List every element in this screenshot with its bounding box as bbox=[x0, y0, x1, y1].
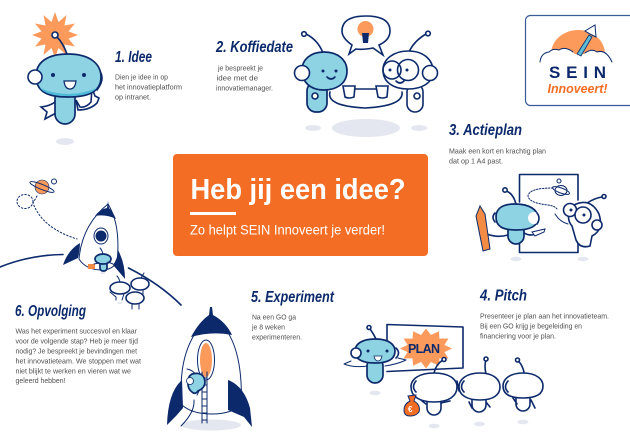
heading: 3. Actieplan: 3. Actieplan bbox=[449, 122, 522, 139]
panel: central banner bbox=[173, 154, 428, 256]
heading: 4. Pitch: 4. Pitch bbox=[479, 288, 527, 304]
text: actieplan description: Maak een kort en krachtig plan bbox=[449, 146, 546, 156]
icon: robot with raised finger bbox=[28, 32, 102, 124]
text: opvolging description bbox=[16, 326, 142, 385]
icon: orange planet bbox=[29, 179, 56, 194]
banner underline bbox=[190, 212, 236, 215]
banner subtitle: Zo helpt SEIN Innoveert je verder! bbox=[190, 222, 385, 238]
logo: SEIN Innoveert bbox=[526, 16, 630, 106]
heading: 1. Idee: 1. Idee bbox=[115, 49, 152, 66]
icon: small blue robot with bag bbox=[88, 248, 113, 274]
text: experiment description: Na een GO ga bbox=[252, 312, 297, 322]
shadow bbox=[56, 138, 74, 145]
rocket bbox=[577, 25, 596, 56]
panel: step 1 idee bbox=[28, 12, 182, 145]
star with PLAN bbox=[400, 328, 452, 368]
panel: step 4 pitch bbox=[344, 288, 609, 428]
planet drawing bbox=[528, 179, 570, 209]
text: opvolging description: Was het experiment succesvol en klaar bbox=[16, 326, 137, 336]
text: opvolging description: voor de volgende stap? Heb je meer tijd bbox=[16, 336, 138, 346]
panel: step 2 koffiedate bbox=[215, 16, 438, 137]
text: koffiedate description: innovatiemanager. bbox=[216, 84, 273, 92]
illustration: rocket bbox=[63, 201, 125, 279]
illustration: rocket with ladder bbox=[167, 307, 252, 427]
icon: money bag: € bbox=[408, 405, 413, 414]
panel: step 3 actieplan bbox=[449, 122, 606, 261]
text: experiment description: je 8 weken bbox=[251, 322, 285, 332]
logo text SEIN: SEIN bbox=[549, 63, 606, 82]
icon: blue robot bbox=[294, 32, 347, 112]
shadows bbox=[305, 119, 427, 137]
panel: step 5 experiment bbox=[167, 289, 335, 430]
icon: white robot group bbox=[110, 273, 149, 309]
text: idee description: het innovatieplatform bbox=[115, 82, 182, 92]
dashed flight path bbox=[17, 194, 77, 239]
icon: speech bubble with light bulb bbox=[342, 16, 390, 55]
icon: blue robot with pencil bbox=[476, 188, 545, 251]
text: opvolging description: het innovatieteam. We stoppen met wat bbox=[16, 356, 142, 365]
text: koffiedate description bbox=[216, 64, 273, 92]
shadow bbox=[181, 420, 241, 430]
logo text Innoveert: Innoveert! bbox=[548, 81, 608, 96]
panel: step 6 opvolging bbox=[0, 179, 181, 385]
icon: white robot with glasses pointing bbox=[555, 194, 606, 247]
shadows bbox=[370, 391, 528, 428]
text: koffiedate description: je bespreekt je bbox=[217, 64, 263, 72]
planet surface arcs bbox=[0, 254, 181, 305]
shadows bbox=[510, 257, 588, 261]
text: actieplan description bbox=[449, 146, 546, 166]
icon: money bag bbox=[404, 395, 419, 416]
banner background bbox=[173, 154, 428, 256]
banner title: Heb jij een idee? bbox=[190, 174, 406, 206]
text: pitch description: Bij een GO krijg je begeleiding en bbox=[480, 322, 582, 330]
presentation board bbox=[387, 324, 463, 372]
icon: white robot with glasses bbox=[383, 31, 438, 112]
text: idee description: Dien je idee in op bbox=[115, 72, 168, 82]
text: opvolging description: geleerd hebben! bbox=[16, 376, 66, 385]
text: opvolging description: nodig? Je bespreekt je bevindingen met bbox=[16, 346, 138, 356]
heading: 5. Experiment: 5. Experiment bbox=[251, 289, 335, 306]
text: opvolging description: niet blijkt te werken en vieren wat we bbox=[16, 366, 131, 375]
text: koffiedate description: idee met de bbox=[216, 74, 258, 82]
text: actieplan description: dat op 1 A4 past. bbox=[449, 156, 503, 166]
illustration: table with cups bbox=[312, 86, 420, 108]
text: pitch description: financiering voor je plan. bbox=[480, 332, 556, 340]
drawing board bbox=[520, 174, 578, 252]
heading: 6. Opvolging: 6. Opvolging bbox=[15, 303, 86, 320]
text: experiment description: experimenteren. bbox=[252, 332, 302, 342]
icon: white robot audience bbox=[411, 357, 543, 415]
text: idee description: op intranet. bbox=[115, 92, 151, 102]
heading: 2. Koffiedate: 2. Koffiedate bbox=[215, 39, 293, 56]
clouds bbox=[540, 48, 612, 62]
icon: blue robot presenting bbox=[344, 326, 406, 383]
star with PLAN: PLAN bbox=[408, 342, 440, 356]
text: pitch description: Presenteer je plan aan het innovatieteam. bbox=[480, 312, 609, 320]
icon: blue robot on ladder bbox=[186, 369, 205, 395]
orange arc bbox=[551, 30, 605, 54]
text: pitch description bbox=[480, 312, 609, 340]
icon: orange idea star bbox=[32, 12, 78, 58]
text: idee description bbox=[115, 72, 182, 102]
text: experiment description bbox=[251, 312, 302, 342]
logo frame bbox=[526, 16, 630, 106]
